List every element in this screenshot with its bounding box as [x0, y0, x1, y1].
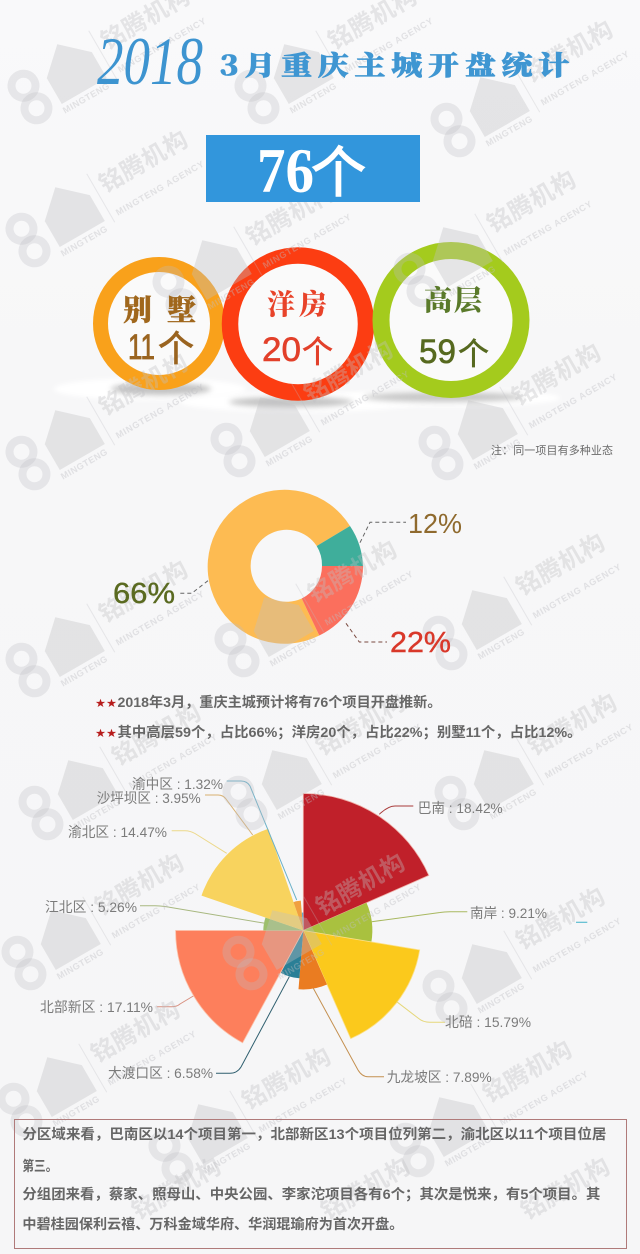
donut leader: 66%	[179, 581, 208, 593]
ring label: villa: 别墅	[123, 288, 196, 329]
rose leader lines	[140, 781, 587, 1077]
sector: 沙坪坝区	[294, 901, 303, 930]
sector: 北部新区	[176, 930, 303, 1043]
summary line 2: ★★	[95, 726, 117, 740]
watermark pattern: 铭腾机构	[308, 683, 410, 762]
watermark pattern: 铭腾机构	[234, 1037, 336, 1116]
ring label: high-rise: 个	[458, 337, 489, 372]
watermark pattern: MINGTENG AGENCY	[106, 1029, 198, 1088]
watermark pattern: 铭腾机构	[83, 990, 185, 1069]
watermark pattern: 铭腾机构	[300, 530, 402, 609]
watermark pattern: MINGTENG	[59, 654, 109, 688]
title year: 2018	[97, 23, 203, 99]
watermark pattern: 铭腾机构	[308, 843, 410, 922]
watermark pattern: 铭腾机构	[91, 550, 193, 629]
ring shadows	[54, 378, 560, 412]
watermark pattern: MINGTENG AGENCY	[343, 16, 435, 75]
bottom text box: 中碧桂园保利云禧、万科金域华府、华润琨瑜府为首次开盘。	[22, 1216, 403, 1232]
watermark pattern: MINGTENG	[268, 634, 318, 668]
watermark pattern: MINGTENG AGENCY	[331, 882, 423, 941]
label: 沙坪坝区: 沙坪坝区 : 3.95%	[97, 790, 201, 806]
watermark pattern: MINGTENG AGENCY	[502, 199, 594, 258]
label: 九龙坡区: 九龙坡区 : 7.89%	[387, 1069, 492, 1085]
donut leader: 12%	[360, 522, 406, 543]
watermark pattern: 铭腾机构	[104, 693, 206, 772]
watermark pattern: MINGTENG	[51, 1094, 101, 1128]
ring: high-rise green	[381, 250, 521, 390]
watermark pattern: MINGTENG AGENCY	[543, 722, 635, 781]
watermark pattern: MINGTENG	[488, 787, 538, 821]
ring label: villa	[123, 288, 196, 369]
title subtitle: 3月重庆主城开盘统计	[220, 45, 569, 83]
watermark pattern: MINGTENG	[59, 224, 109, 258]
watermark pattern: 铭腾机构	[475, 1030, 577, 1109]
watermark pattern: MINGTENG	[276, 947, 326, 981]
watermark pattern: MINGTENG AGENCY	[114, 589, 206, 648]
watermark pattern: MINGTENG AGENCY	[323, 569, 415, 628]
bottom text box	[14, 1120, 626, 1248]
watermark pattern: MINGTENG AGENCY	[498, 1069, 590, 1128]
watermark pattern: MINGTENG	[55, 947, 105, 981]
watermark pattern: MINGTENG	[276, 787, 326, 821]
bottom text box: 分区域来看，巴南区以14个项目第一，北部新区13个项目位列第二，渝北区以11个项目位居	[22, 1126, 606, 1142]
watermark pattern: MINGTENG	[264, 434, 314, 468]
sector: 南岸	[303, 903, 372, 942]
ring label: western house: 20	[262, 331, 301, 369]
ring label: western house: 个	[302, 335, 333, 370]
label: 巴南: 巴南 : 18.42%	[418, 800, 503, 816]
watermark pattern: MINGTENG	[443, 1134, 493, 1168]
ring: villa orange	[100, 264, 218, 382]
ring label: villa: 11	[128, 328, 155, 367]
watermark pattern: 铭腾机构	[313, 1147, 415, 1226]
label: 南岸: 南岸 : 9.21%	[470, 905, 547, 921]
total box: 76	[257, 135, 314, 206]
watermark pattern: MINGTENG AGENCY	[527, 372, 619, 431]
watermark pattern: 铭腾机构	[508, 523, 610, 602]
watermark pattern: MINGTENG	[472, 437, 522, 471]
watermark pattern: MINGTENG AGENCY	[331, 722, 423, 781]
ring label: western house	[262, 283, 333, 370]
ring label: western house: 洋房	[267, 283, 327, 323]
sector: 九龙坡区	[298, 930, 327, 989]
summary line 1: 2018年3月，重庆主城预计将有76个项目开盘推新。	[118, 694, 442, 710]
watermark pattern: MINGTENG AGENCY	[261, 212, 353, 271]
donut value: 66%: 66%	[113, 578, 175, 610]
watermark pattern: MINGTENG AGENCY	[116, 16, 208, 75]
ring label: villa: 个	[158, 328, 194, 369]
watermark pattern: MINGTENG AGENCY	[257, 1076, 349, 1135]
bottom text box: 第三。	[22, 1158, 57, 1174]
watermark pattern: MINGTENG	[206, 277, 256, 311]
label: 江北区: 江北区 : 5.26%	[45, 899, 137, 915]
watermark pattern: 铭腾机构	[124, 1147, 226, 1226]
watermark pattern: 铭腾机构	[516, 10, 618, 89]
donut leader: 22%	[346, 623, 387, 642]
watermark pattern: MINGTENG AGENCY	[539, 49, 631, 108]
ring label: high-rise	[419, 279, 489, 372]
watermark pattern: 铭腾机构	[91, 343, 193, 422]
rose pie chart	[176, 794, 429, 1043]
watermark pattern: MINGTENG AGENCY	[114, 159, 206, 218]
rose labels	[40, 776, 547, 1085]
watermark pattern: MINGTENG	[288, 81, 338, 115]
watermark pattern: MINGTENG	[476, 627, 526, 661]
label: 北部新区: 北部新区 : 17.11%	[40, 999, 153, 1015]
watermark pattern: 铭腾机构	[296, 330, 398, 409]
label: 大渡口区: 大渡口区 : 6.58%	[108, 1065, 213, 1081]
sector: 渝中区	[302, 912, 303, 930]
watermark pattern: 铭腾机构	[479, 160, 581, 239]
label: 北碚: 北碚 : 15.79%	[445, 1014, 531, 1030]
watermark pattern: 铭腾机构	[238, 173, 340, 252]
total box: 个	[311, 142, 366, 204]
watermark pattern: MINGTENG	[61, 81, 111, 115]
watermark pattern: MINGTENG AGENCY	[127, 732, 219, 791]
watermark pattern: MINGTENG AGENCY	[110, 882, 202, 941]
watermark pattern: MINGTENG AGENCY	[319, 369, 411, 428]
watermark pattern: 铭腾机构	[513, 1147, 615, 1226]
watermark pattern: MINGTENG AGENCY	[531, 916, 623, 975]
ring label: high-rise: 59	[419, 333, 456, 371]
total box	[206, 135, 420, 206]
watermark pattern: 铭腾机构	[91, 120, 193, 199]
sector: 渝北区	[202, 829, 303, 930]
summary line 2: 其中高层59个，占比66%；洋房20个，占比22%；别墅11个，占比12%。	[118, 724, 582, 741]
watermark pattern: 铭腾机构	[508, 877, 610, 956]
sector: 北碚	[303, 930, 420, 1039]
donut chart	[208, 490, 363, 644]
donut value: 22%: 22%	[390, 627, 451, 659]
sector: 大渡口区	[280, 930, 303, 978]
watermark pattern: MINGTENG	[202, 1141, 252, 1175]
ring label: high-rise: 高层	[424, 279, 484, 319]
watermark pattern: MINGTENG AGENCY	[531, 562, 623, 621]
donut value: 12%: 12%	[408, 508, 462, 539]
bottom text box: 分组团来看，蔡家、照母山、中央公园、李家沱项目各有6个；其次是悦来，有5个项目。其	[22, 1186, 600, 1203]
watermark pattern: 铭腾机构	[87, 843, 189, 922]
watermark pattern: MINGTENG	[59, 447, 109, 481]
watermark pattern: 铭腾机构	[504, 333, 606, 412]
label: 渝北区: 渝北区 : 14.47%	[68, 824, 167, 840]
sector: 巴南	[303, 794, 429, 930]
summary line 1: ★★	[95, 696, 117, 710]
watermark pattern: 铭腾机构	[520, 683, 622, 762]
title	[97, 23, 569, 99]
note: 注：同一项目有多种业态	[491, 443, 613, 457]
watermark pattern: MINGTENG	[476, 981, 526, 1015]
ring: western house red	[230, 256, 366, 392]
watermark pattern: MINGTENG	[447, 264, 497, 298]
label: 渝中区: 渝中区 : 1.32%	[132, 776, 223, 792]
watermark pattern: MINGTENG AGENCY	[114, 382, 206, 441]
watermark pattern: MINGTENG	[72, 797, 122, 831]
sector: 江北区	[263, 918, 303, 930]
watermark pattern: MINGTENG	[484, 114, 534, 148]
